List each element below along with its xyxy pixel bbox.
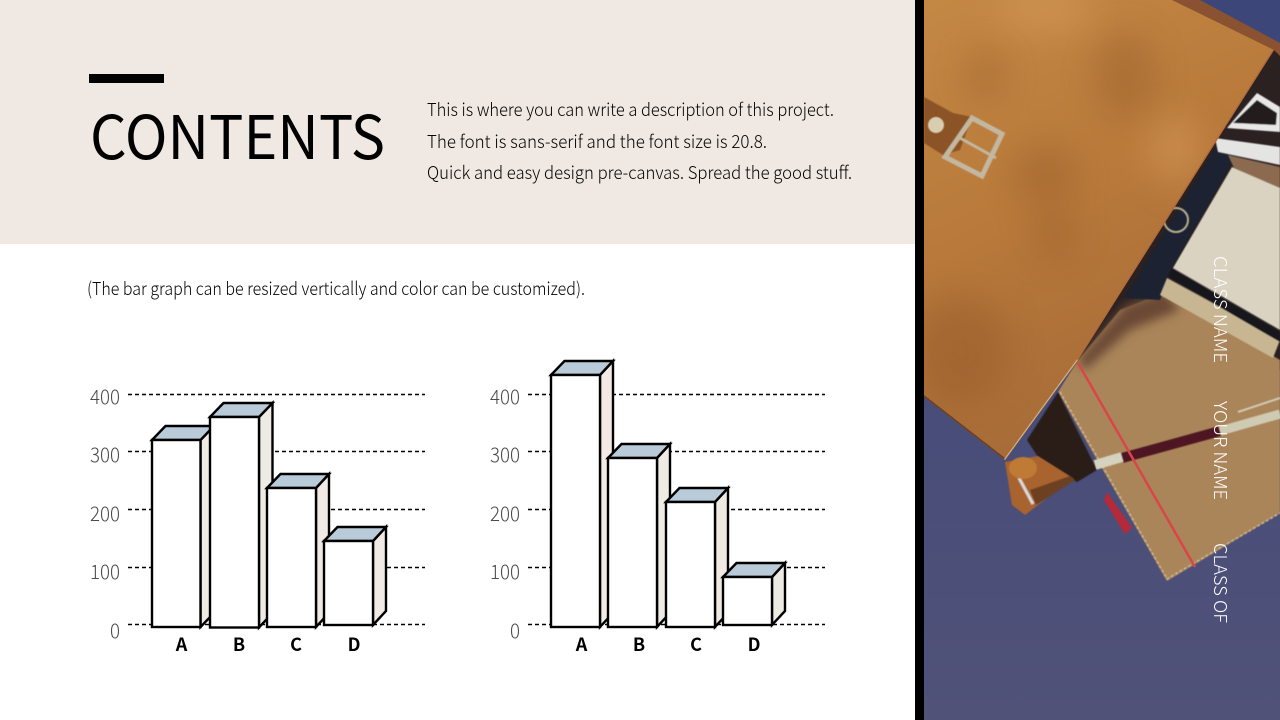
elastic band	[1078, 363, 1195, 567]
left bar chart: 400	[90, 381, 120, 410]
project description	[427, 96, 852, 185]
black divider	[915, 0, 924, 720]
dark pocket	[1027, 392, 1097, 482]
white book	[1160, 167, 1280, 358]
project description: The font is sans-serif and the font size is 20.8.	[427, 128, 767, 154]
vertical label: class of: CLASS OF	[1208, 543, 1234, 623]
right bar chart: D	[748, 631, 760, 657]
project description: Quick and easy design pre-canvas. Spread the good stuff.	[427, 159, 852, 185]
left bar chart: 100	[90, 556, 120, 585]
bag flap bottom	[1005, 456, 1075, 515]
left bar chart: 0	[110, 615, 120, 644]
photo: leather bag and notebooks	[910, 0, 1280, 720]
bar C	[267, 474, 329, 627]
right bar chart: 300	[490, 439, 520, 468]
right bar chart: 400	[490, 381, 520, 410]
header panel	[0, 0, 915, 244]
bar A	[152, 426, 214, 627]
left bar chart: C	[290, 631, 302, 657]
right bar chart: 100	[490, 556, 520, 585]
bag top seam strip	[1172, 0, 1280, 56]
right bar chart	[490, 361, 825, 657]
left bar chart: A	[175, 631, 188, 657]
right bar chart: 200	[490, 498, 520, 527]
buckle strap	[924, 97, 972, 155]
red tag	[1104, 492, 1132, 534]
bar B	[608, 444, 670, 627]
right bar chart: 0	[510, 615, 520, 644]
chart note: (The bar graph can be resized vertically and color can be customized).	[87, 275, 585, 301]
right bar chart: A	[575, 631, 588, 657]
project description: This is where you can write a description of this project.	[427, 96, 834, 122]
bar C	[666, 488, 728, 627]
title: CONTENTS	[90, 90, 385, 177]
left bar chart: B	[233, 631, 245, 657]
bar B	[210, 403, 272, 628]
buckle rivet	[928, 117, 944, 133]
buckle	[945, 118, 1002, 176]
bar D	[723, 563, 785, 625]
left bar chart: 200	[90, 498, 120, 527]
emblem	[1164, 208, 1188, 232]
title accent bar	[89, 74, 164, 83]
dark backing behind bag contents	[1060, 50, 1280, 392]
right bar chart: C	[690, 631, 702, 657]
left bar chart	[90, 381, 425, 657]
cork notebook	[1058, 290, 1280, 581]
sunglasses	[1215, 93, 1280, 190]
bar A	[551, 361, 613, 627]
pen	[1095, 398, 1280, 465]
left bar chart: D	[348, 631, 360, 657]
right bar chart: B	[633, 631, 645, 657]
dark book	[1125, 148, 1236, 300]
bag leather	[910, 0, 1280, 470]
vertical label: your name: YOUR NAME	[1208, 401, 1234, 500]
left bar chart: 300	[90, 439, 120, 468]
vertical label: class name: CLASS NAME	[1208, 256, 1234, 363]
bar D	[324, 527, 386, 625]
